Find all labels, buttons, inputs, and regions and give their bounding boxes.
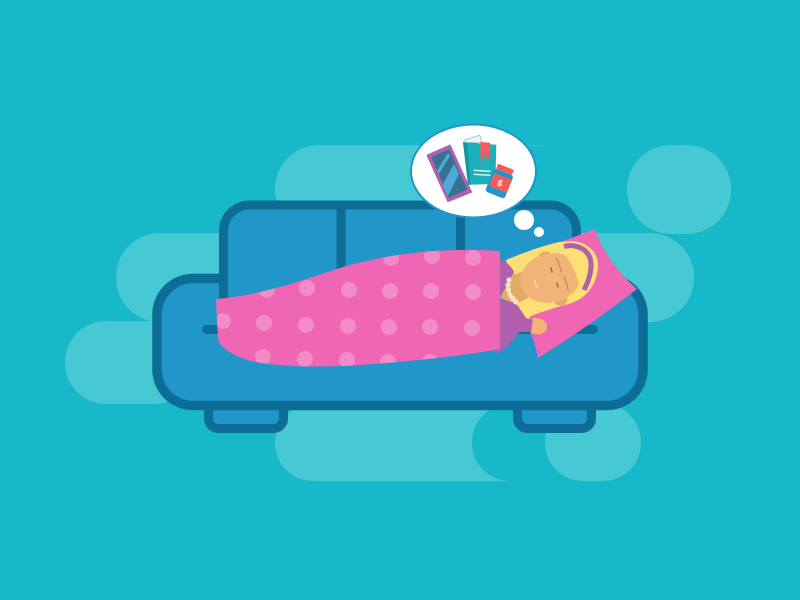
closed eyes — [551, 268, 558, 287]
book text lines — [474, 170, 490, 175]
hand — [531, 318, 547, 334]
body upper — [495, 258, 514, 300]
body lower — [495, 298, 536, 354]
hair fringe — [561, 247, 591, 296]
ears — [538, 250, 552, 262]
bookmark — [480, 142, 490, 163]
head — [515, 247, 586, 309]
blanket — [215, 248, 500, 370]
pillow — [508, 229, 637, 358]
sleeping woman — [495, 241, 598, 354]
smile — [535, 280, 538, 288]
thought bubble — [411, 124, 544, 237]
eyebrows — [556, 258, 568, 290]
sofa leg left — [208, 395, 284, 428]
sofa seat — [157, 278, 643, 406]
sofa — [157, 203, 643, 428]
hair — [506, 241, 598, 321]
neck — [500, 272, 528, 304]
icon: book — [463, 135, 496, 185]
thought dots — [514, 210, 534, 230]
icon: phone — [427, 145, 471, 201]
seat crease — [202, 325, 598, 334]
headband — [564, 246, 591, 290]
pearl necklace — [505, 277, 519, 305]
icon: pill jar: $ — [496, 178, 504, 189]
sofa backrest — [224, 203, 576, 305]
blanket polka dots — [215, 248, 481, 370]
sofa leg right — [518, 395, 592, 428]
background clouds — [65, 145, 731, 481]
